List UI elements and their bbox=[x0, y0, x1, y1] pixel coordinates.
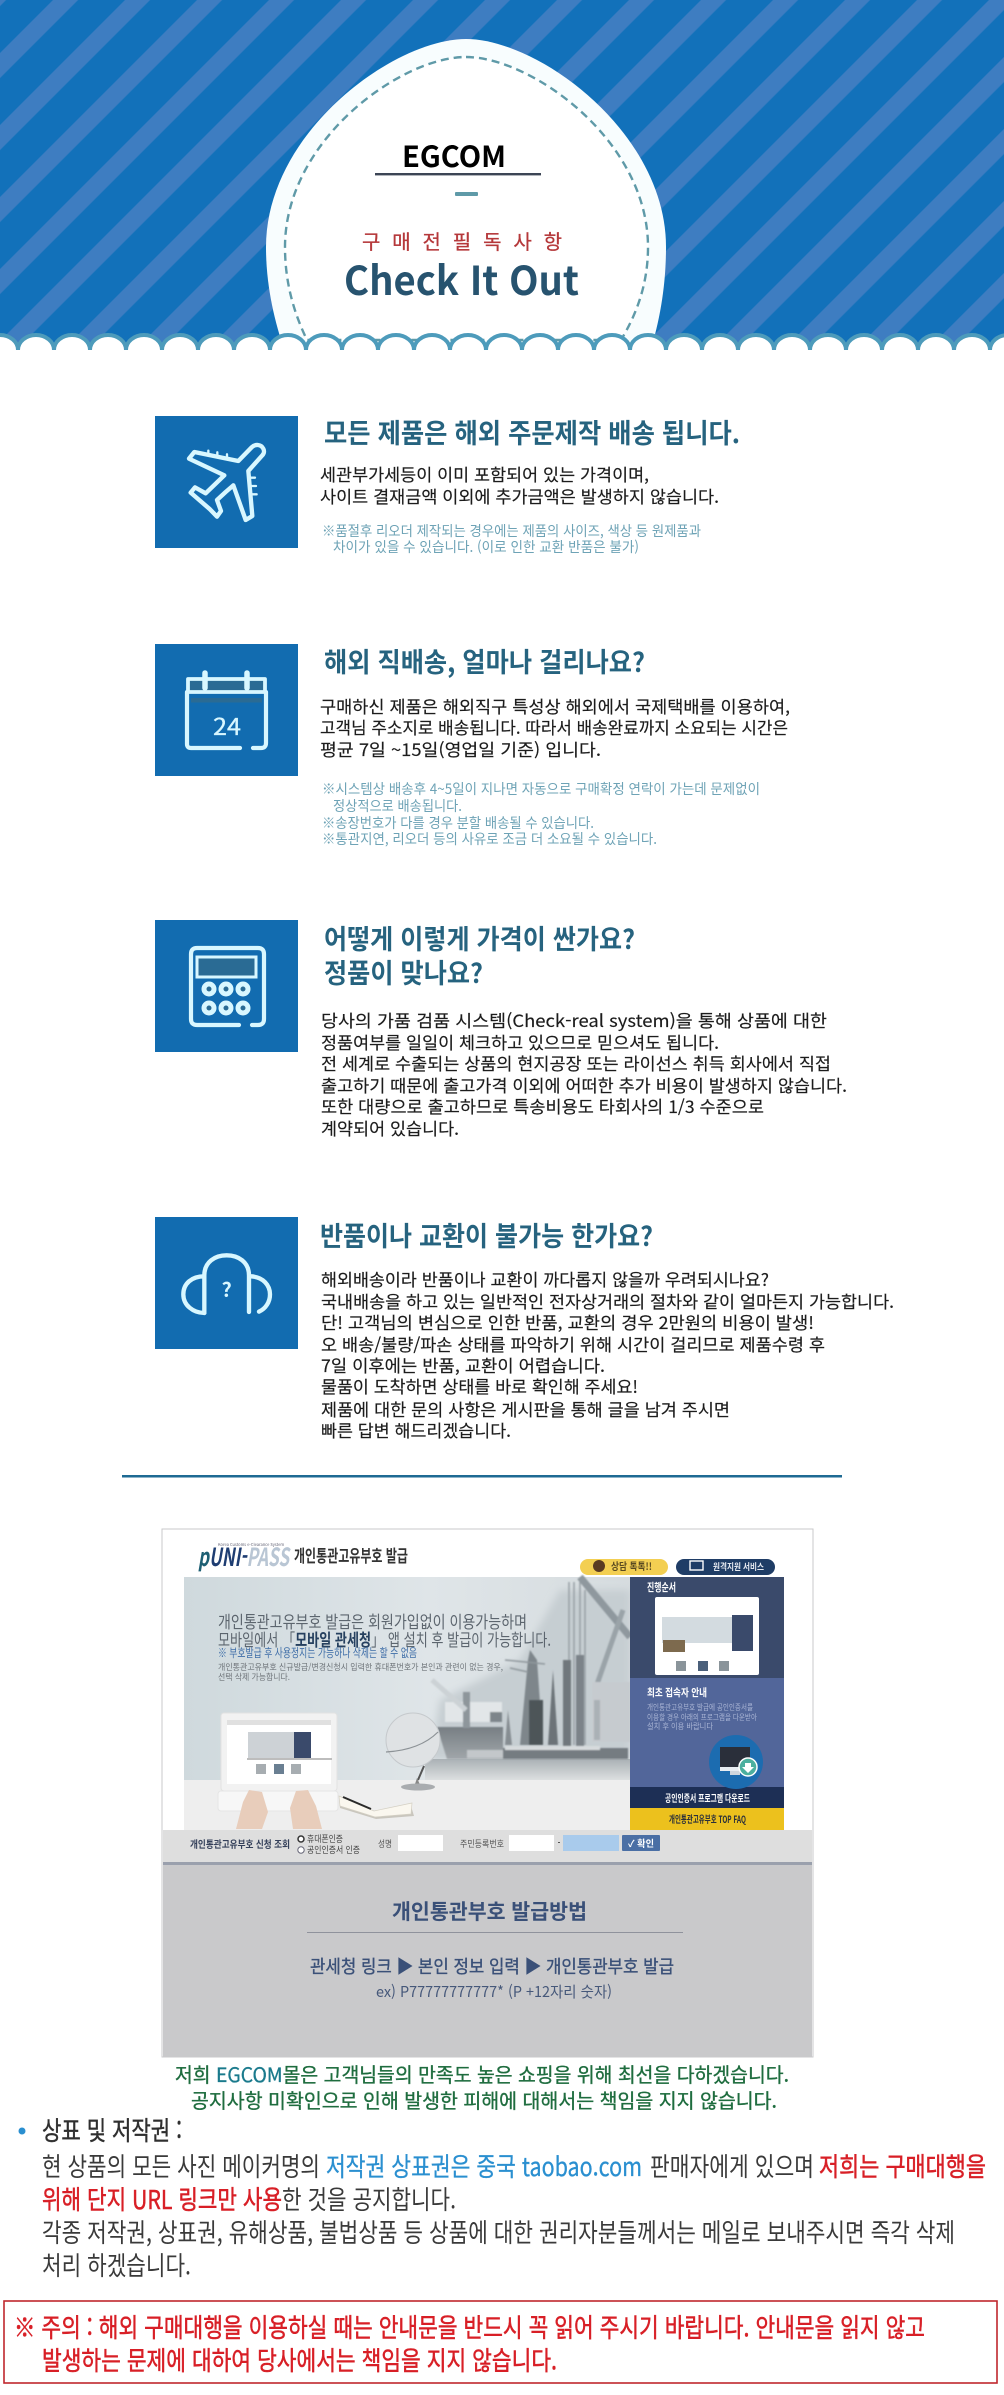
trademark body: 판매자에게 있으며 bbox=[650, 2147, 814, 2184]
icon: calendar bbox=[155, 644, 298, 776]
logo: pUNI-PASS bbox=[198, 1538, 291, 1574]
first visit notice: 설치 후 이용 바랍니다 bbox=[647, 1721, 714, 1732]
panel: customs code screenshot bbox=[162, 1529, 813, 2057]
brand underline bbox=[375, 173, 541, 175]
trademark body: 위해 단지 URL 링크만 사용 bbox=[42, 2180, 282, 2217]
small note bbox=[322, 521, 701, 557]
small notes: ※시스템상 배송후 4~5일이 지나면 자동으로 구매확정 연락이 가는데 문제없이 bbox=[322, 779, 760, 799]
cranes bbox=[505, 1577, 630, 1748]
heading: 정품이 맞나요? bbox=[324, 952, 483, 991]
short dash bbox=[455, 192, 478, 196]
body text: 빠른 답변 해드리겠습니다. bbox=[321, 1417, 511, 1442]
body text: 평균 7일 ~15일(영업일 기준) 입니다. bbox=[320, 736, 601, 761]
button: remote support bbox=[676, 1559, 775, 1575]
brand name: EGCOM bbox=[402, 134, 506, 176]
small notes: 정상적으로 배송됩니다. bbox=[333, 796, 462, 816]
body text: 당사의 가품 검품 시스템(Check-real system)을 통해 상품에 대한 bbox=[321, 1007, 827, 1032]
body text: 세관부가세등이 이미 포함되어 있는 가격이며, bbox=[320, 461, 649, 486]
hero text: 선택 삭제 가능합니다. bbox=[218, 1671, 290, 1683]
heading bbox=[324, 918, 635, 991]
trademark body bbox=[42, 2147, 986, 2283]
FAQ: 개인통관고유부호 TOP FAQ bbox=[669, 1811, 746, 1826]
body text: 제품에 대한 문의 사항은 게시판을 통해 글을 남겨 주시면 bbox=[321, 1396, 730, 1421]
certificate download: 공인인증서 프로그램 다운로드 bbox=[665, 1790, 750, 1805]
lookup form bar: 성명 bbox=[378, 1837, 392, 1850]
trademark body: 처리 하겠습니다. bbox=[42, 2246, 191, 2283]
lookup form bar: 주민등록번호 bbox=[460, 1837, 504, 1850]
button: consult talk: 상담 톡톡!! bbox=[611, 1558, 652, 1573]
heading: 반품이나 교환이 불가능 한가요? bbox=[320, 1215, 653, 1254]
body text bbox=[320, 693, 790, 761]
heading: 어떻게 이렇게 가격이 싼가요? bbox=[324, 918, 635, 957]
hero text: ※ 부호발급 후 사용정지는 가능하나 삭제는 할 수 없음 bbox=[218, 1644, 417, 1661]
bullet bbox=[18, 2128, 26, 2134]
lookup form bar: 휴대폰인증 bbox=[307, 1832, 343, 1845]
green notice bbox=[175, 2059, 789, 2114]
body text: 정품여부를 일일이 체크하고 있으므로 믿으셔도 됩니다. bbox=[321, 1029, 719, 1054]
hero text: 개인통관고유부호 신규발급/변경신청시 입력한 휴대폰번호가 본인과 관련이 없는 경우, bbox=[218, 1661, 503, 1673]
section: overseas shipping bbox=[155, 412, 740, 557]
heading: 해외 직배송, 얼마나 걸리나요? bbox=[324, 641, 645, 680]
small notes: ※통관지연, 리오더 등의 사유로 조금 더 소요될 수 있습니다. bbox=[322, 829, 657, 849]
icon: airplane bbox=[155, 416, 298, 548]
button: consult talk bbox=[580, 1558, 668, 1575]
icon: calculator bbox=[155, 920, 298, 1052]
first visit notice: 개인통관고유부호 발급에 공인인증서를 bbox=[647, 1702, 753, 1713]
body text: 구매하신 제품은 해외직구 특성상 해외에서 국제택배를 이용하여, bbox=[320, 693, 790, 718]
main title: Check It Out bbox=[344, 249, 579, 307]
section: pricing and authenticity bbox=[155, 918, 847, 1140]
logo: Korea Customs e-Clearance System bbox=[218, 1542, 284, 1548]
hero image bbox=[184, 1577, 630, 1830]
header banner bbox=[0, 0, 1004, 372]
hands bbox=[236, 1790, 322, 1829]
side column bbox=[630, 1577, 784, 1830]
button: remote support: 원격지원 서비스 bbox=[713, 1560, 764, 1573]
hero text bbox=[218, 1608, 551, 1683]
subtitle: 구매전필독사항 bbox=[362, 226, 562, 255]
ship bbox=[432, 1680, 503, 1759]
lookup form bar: 공인인증서 인증 bbox=[307, 1843, 360, 1856]
body text: 출고하기 때문에 출고가격 이외에 어떠한 추가 비용이 발생하지 않습니다. bbox=[321, 1072, 847, 1097]
body text: 오 배송/불량/파손 상태를 파악하기 위해 시간이 걸리므로 제품수령 후 bbox=[321, 1331, 825, 1356]
icon: headset question bbox=[155, 1217, 298, 1349]
lookup form bar: ✓ 확인 bbox=[628, 1836, 654, 1850]
body text: 해외배송이라 반품이나 교환이 까다롭지 않을까 우려되시나요? bbox=[321, 1266, 769, 1291]
body text: 7일 이후에는 반품, 교환이 어렵습니다. bbox=[321, 1352, 605, 1377]
step heading: 진행순서 bbox=[647, 1579, 676, 1595]
lookup form bar bbox=[163, 1830, 812, 1865]
icon: download monitor bbox=[709, 1735, 763, 1789]
small note: ※품절후 리오더 제작되는 경우에는 제품의 사이즈, 색상 등 원제품과 bbox=[322, 521, 701, 541]
trademark heading: 상표 및 저작권 : bbox=[42, 2111, 182, 2148]
body text bbox=[321, 1266, 894, 1442]
body text bbox=[320, 461, 719, 508]
page title: 개인통관고유부호 발급 bbox=[294, 1542, 408, 1567]
laptop bbox=[218, 1713, 338, 1811]
section: delivery time bbox=[155, 641, 790, 849]
body text: 전 세계로 수출되는 상품의 현지공장 또는 라이선스 취득 회사에서 직접 bbox=[321, 1050, 831, 1075]
pier bbox=[467, 1750, 503, 1758]
body text bbox=[321, 1007, 847, 1140]
panel: issuance method bbox=[163, 1865, 812, 2057]
issuance steps: 관세청 링크 ▶ 본인 정보 입력 ▶ 개인통관부호 발급 bbox=[310, 1953, 674, 1979]
body text: 또한 대량으로 출고하므로 특송비용도 타회사의 1/3 수준으로 bbox=[321, 1093, 764, 1118]
scalloped edge bbox=[0, 335, 1004, 372]
icon: calendar: 24 bbox=[213, 708, 241, 742]
warning box bbox=[4, 2301, 997, 2383]
trademark and copyright bbox=[18, 2111, 986, 2283]
body text: 국내배송을 하고 있는 일반적인 전자상거래의 절차와 같이 얼마든지 가능합니다. bbox=[321, 1288, 894, 1313]
notebook bbox=[339, 1796, 414, 1819]
mini screenshot bbox=[655, 1597, 759, 1675]
hero text: 개인통관고유부호 발급은 회원가입없이 이용가능하며 bbox=[218, 1608, 527, 1633]
small notes bbox=[322, 779, 760, 849]
lookup form bar: 개인통관고유부호 신청 조회 bbox=[190, 1836, 290, 1851]
trademark body: 현 상품의 모든 사진 메이커명의 bbox=[42, 2147, 320, 2184]
hero text: 모바일에서 「모바일 관세청」 앱 설치 후 발급이 가능합니다. bbox=[218, 1626, 551, 1651]
warning box: 발생하는 문제에 대하여 당사에서는 책임을 지지 않습니다. bbox=[42, 2341, 557, 2378]
section: returns and exchange bbox=[155, 1215, 894, 1442]
small notes: ※송장번호가 다를 경우 분할 배송될 수 있습니다. bbox=[322, 813, 594, 833]
small note: 차이가 있을 수 있습니다. (이로 인한 교환 반품은 불가) bbox=[333, 537, 639, 557]
first visit notice: 최초 접속자 안내 bbox=[647, 1685, 707, 1700]
issuance heading: 개인통관부호 발급방법 bbox=[392, 1896, 587, 1926]
example code: ex) P77777777777* (P +12자리 숫자) bbox=[376, 1981, 612, 2002]
green notice: 저희 EGCOM몰은 고객님들의 만족도 높은 쇼핑을 위해 최선을 다하겠습니다. bbox=[175, 2059, 789, 2088]
body text: 계약되어 있습니다. bbox=[321, 1115, 459, 1140]
trademark body: 저작권 상표권은 중국 taobao.com bbox=[326, 2147, 642, 2184]
trademark body: 한 것을 공지합니다. bbox=[282, 2180, 456, 2217]
icon: headset question: ? bbox=[222, 1274, 232, 1303]
egg badge bbox=[266, 39, 666, 352]
heading: 모든 제품은 해외 주문제작 배송 됩니다. bbox=[324, 412, 740, 451]
port scene bbox=[425, 1577, 630, 1780]
globe bbox=[386, 1713, 440, 1790]
first visit notice: 이용할 경우 아래의 프로그램을 다운받아 bbox=[647, 1712, 758, 1723]
body text: 고객님 주소지로 배송됩니다. 따라서 배송완료까지 소요되는 시간은 bbox=[320, 714, 788, 739]
body text: 단! 고객님의 변심으로 인한 반품, 교환의 경우 2만원의 비용이 발생! bbox=[321, 1309, 814, 1334]
body text: 사이트 결재금액 이외에 추가금액은 발생하지 않습니다. bbox=[320, 483, 719, 508]
first visit notice bbox=[647, 1685, 758, 1732]
green notice: 공지사항 미확인으로 인해 발생한 피해에 대해서는 책임을 지지 않습니다. bbox=[191, 2085, 777, 2114]
body text: 물품이 도착하면 상태를 바로 확인해 주세요! bbox=[321, 1373, 638, 1398]
